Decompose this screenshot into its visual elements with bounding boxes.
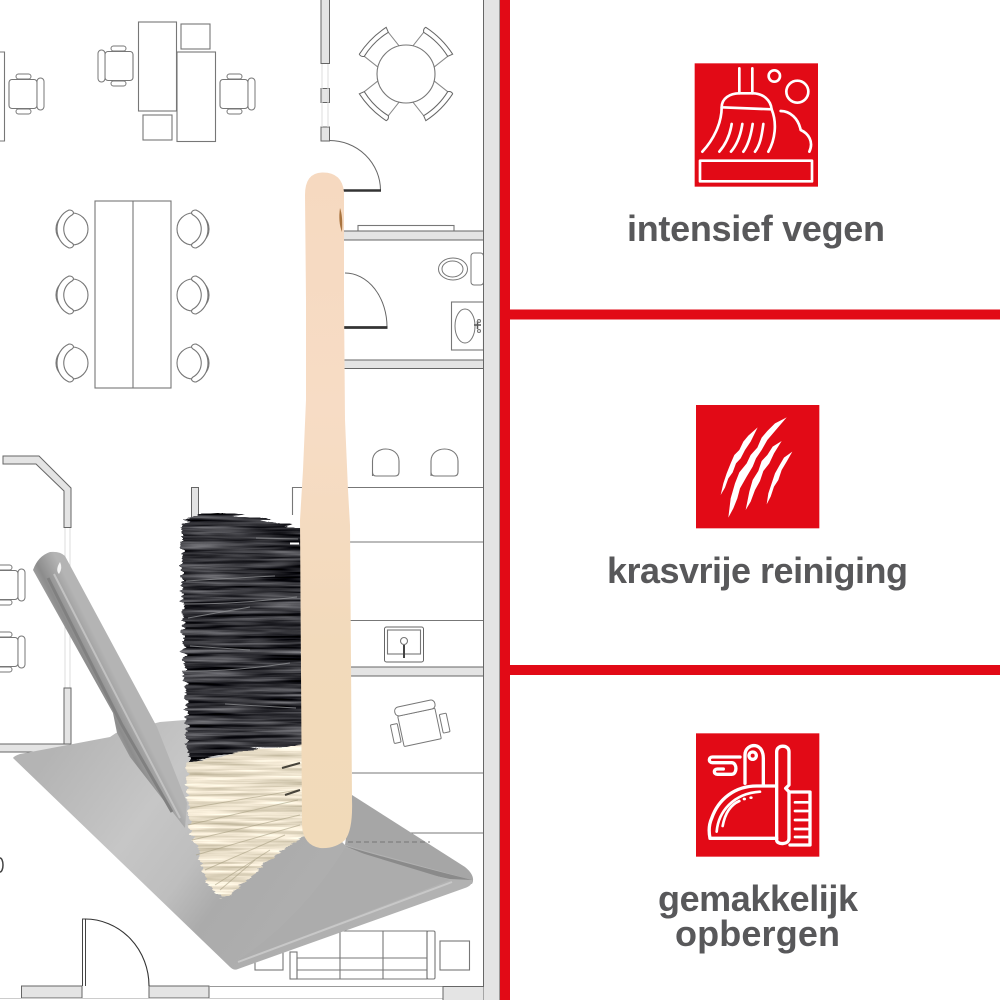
dustpan [13, 552, 473, 970]
label: opbergen [675, 913, 840, 954]
icon: scratch marks [696, 405, 819, 528]
red dividers [500, 0, 1000, 1000]
label: gemakkelijk [658, 878, 859, 919]
icon: broom sweeping [695, 63, 818, 187]
pan lower fold [345, 846, 472, 880]
meeting table with chairs [56, 201, 209, 388]
lounge room [352, 697, 484, 833]
pan body [13, 720, 472, 970]
walls and door, upper room [321, 0, 484, 240]
light bristles [186, 744, 305, 897]
floor plan [0, 0, 500, 1000]
brush [182, 513, 305, 897]
icon: dustpan and brush [696, 733, 819, 857]
pan back wall [345, 795, 473, 884]
sofa and side table [255, 931, 470, 979]
panel: gemakkelijk opbergen [658, 733, 859, 954]
washroom [340, 253, 484, 368]
label [658, 878, 859, 954]
panel: intensief vegen [627, 63, 885, 249]
brush wooden handle [300, 172, 352, 848]
seats room [292, 449, 484, 676]
label: intensief vegen [627, 208, 885, 249]
left room walls [0, 456, 198, 872]
round table with chairs [358, 26, 454, 122]
pan handle [33, 552, 187, 828]
desk group [98, 22, 255, 142]
panel: krasvrije reiniging [607, 405, 908, 591]
label: krasvrije reiniging [607, 550, 908, 591]
bottom walls and door [0, 919, 484, 1000]
dark bristles [182, 513, 305, 762]
far-left desk and chair [0, 52, 44, 141]
outer right wall [484, 0, 500, 1000]
handle knot [339, 208, 342, 232]
